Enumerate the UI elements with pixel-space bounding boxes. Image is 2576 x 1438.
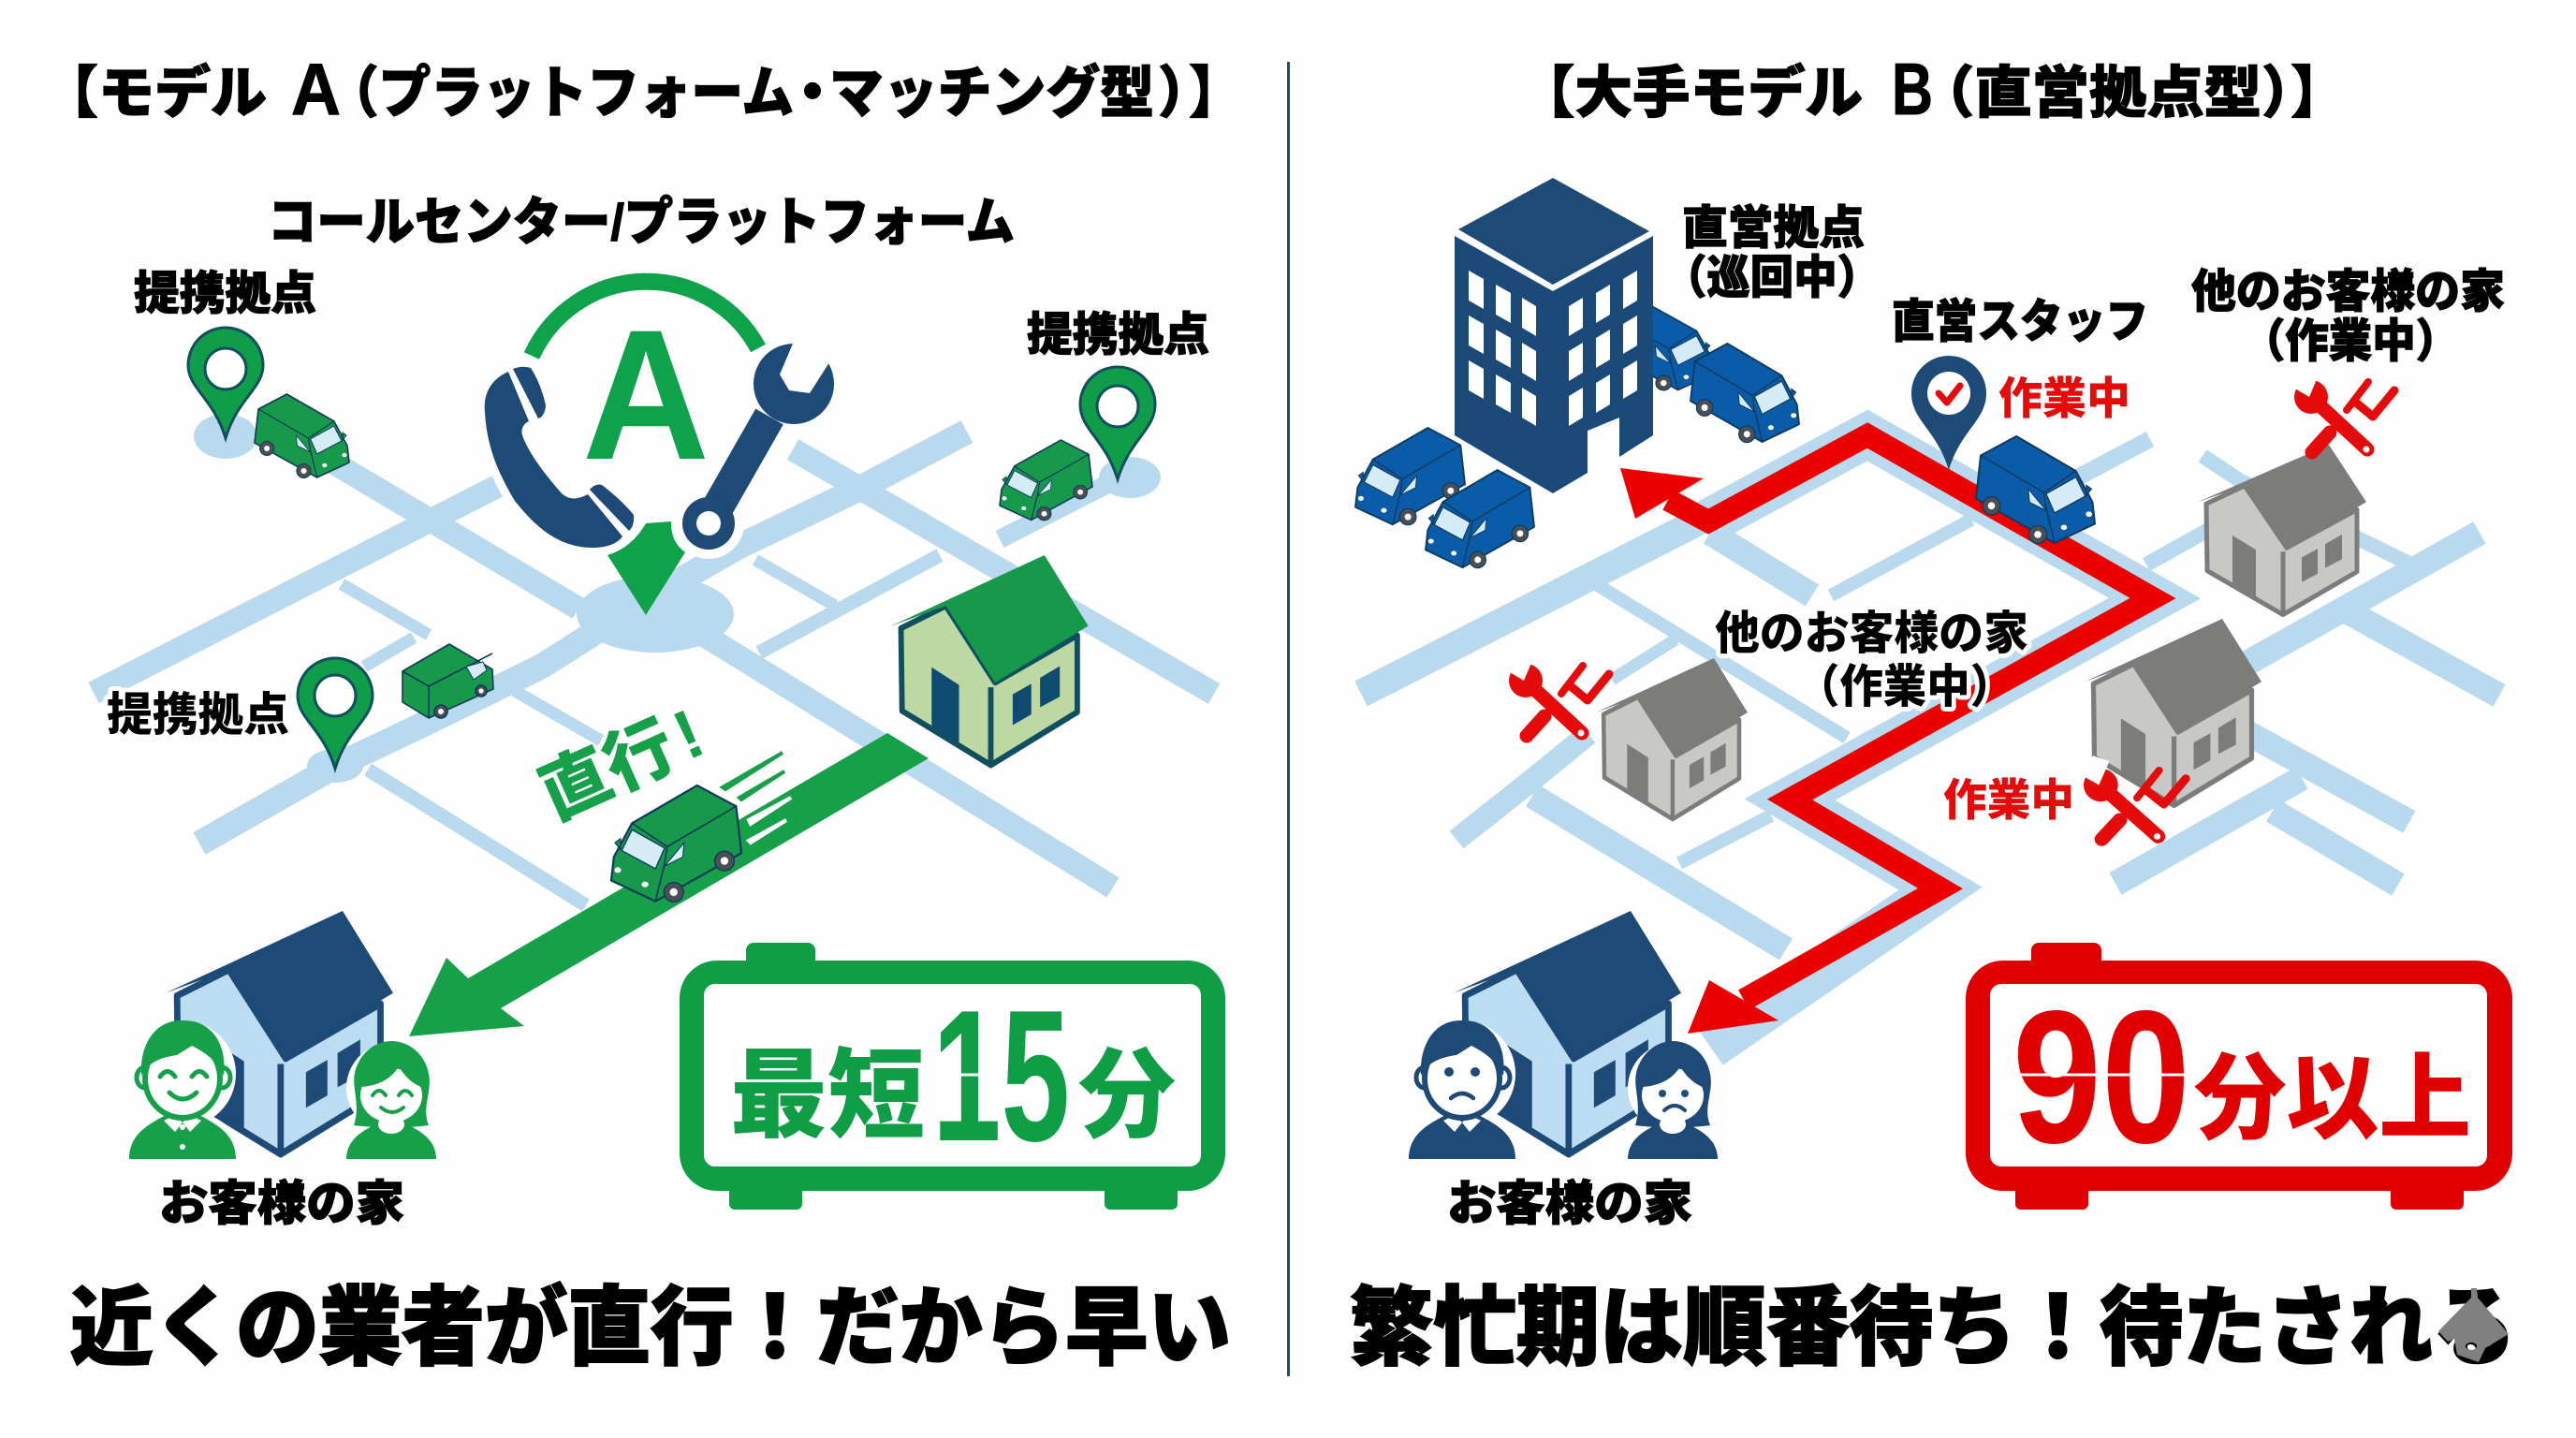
label: other customer 2: （作業中） — [1796, 662, 2013, 712]
icon: pointer — [607, 521, 685, 615]
label: direct base: （巡回中） — [1663, 253, 1881, 303]
label: direct base: 直営拠点 — [1682, 203, 1865, 254]
van: partner 2 — [1000, 440, 1092, 521]
label: call center: コールセンター/プラットフォーム — [268, 193, 1015, 251]
heading: model A: ・ — [784, 62, 841, 125]
timer: fastest 15 minutes: 15 — [932, 972, 1070, 1181]
icon letter A: A — [582, 291, 710, 498]
conclusion: model B: 繁忙期は順番待ち！待たされる — [1350, 1281, 2516, 1376]
van: staff — [1976, 436, 2095, 544]
icon: phone — [485, 367, 634, 548]
icon: wrench — [673, 328, 839, 559]
heading: model B: B — [1892, 48, 1933, 130]
label: customer home A: お客様の家 — [159, 1177, 404, 1230]
label: working 2 (red): 作業中 — [1943, 775, 2074, 825]
pin and label: partner 1 — [134, 269, 316, 438]
label: customer home B: お客様の家 — [1447, 1177, 1692, 1230]
timer: fastest 15 minutes: 最短 — [730, 1042, 925, 1151]
van: direct — [611, 785, 741, 902]
person: woman worried — [1628, 1041, 1718, 1159]
building: direct base — [1455, 178, 1653, 493]
timer: over 90 minutes: 分以上 — [2194, 1047, 2471, 1152]
timer: fastest 15 minutes: 分 — [1078, 1042, 1176, 1151]
icon: tools 2 — [2078, 756, 2186, 840]
house: customer B — [1454, 911, 1681, 1154]
house: customer A — [166, 911, 393, 1154]
label: direct base — [1663, 203, 1881, 303]
label: working (red): 作業中 — [1998, 374, 2130, 423]
heading: model A: （プラットフォーム — [327, 62, 794, 125]
heading: model B — [1517, 48, 2347, 130]
pin and label: partner 2 — [1027, 310, 1209, 479]
label: other customer 1: （作業中） — [2242, 316, 2459, 367]
label: other customer 1: 他のお客様の家 — [2191, 267, 2505, 317]
label: direct: 直行! — [529, 694, 715, 834]
conclusion: model A: 近くの業者が直行！だから早い — [70, 1281, 1231, 1376]
house: other customer 3 — [1596, 658, 1748, 819]
icon: tools 3 — [1503, 651, 1609, 736]
heading: model A: 【モデル — [42, 62, 267, 125]
panel: model A — [42, 48, 1243, 1376]
heading: model B: ） — [2261, 62, 2318, 125]
heading: model A: ） — [1158, 62, 1212, 125]
timer: fastest 15 minutes — [680, 943, 1225, 1210]
label: other customer 2 — [1715, 609, 2028, 712]
house: other customer 2 — [2085, 619, 2261, 805]
timer: over 90 minutes — [1966, 943, 2512, 1210]
speed lines — [723, 753, 791, 843]
label: other customer 2: 他のお客様の家 — [1715, 609, 2028, 659]
label: other customer 1 — [2191, 267, 2505, 367]
icon: tools 1 — [2289, 367, 2394, 453]
heading: model A: マッチング型 — [829, 62, 1154, 125]
arrow: direct route — [409, 733, 929, 1036]
timer: over 90 minutes: 90 — [2012, 971, 2190, 1182]
icon arc — [532, 282, 758, 356]
label: direct staff: 直営スタッフ — [1892, 297, 2148, 347]
person: woman smiling — [346, 1041, 436, 1159]
watermark — [2438, 1288, 2509, 1362]
icon: A logo — [485, 282, 839, 615]
route: red patrol path — [1620, 435, 2153, 1034]
van: partner 3 rear view — [402, 644, 493, 718]
person: man smiling — [124, 1020, 242, 1162]
pin and label: partner 3 — [107, 658, 373, 769]
heading: model B: 】 — [2291, 62, 2347, 125]
arrowhead: to base — [1620, 468, 1704, 519]
house: other customer 1 — [2198, 445, 2366, 615]
pin and label: partner 2: 提携拠点 — [1027, 310, 1209, 360]
panel: model B — [1350, 48, 2516, 1376]
van: base rear — [1610, 302, 1713, 390]
road map: model A — [94, 414, 1214, 905]
road map: model B — [1361, 435, 2499, 1047]
heading: model B: 【大手モデル — [1517, 62, 1863, 125]
arrowhead: to customer — [1688, 980, 1778, 1034]
heading: model A — [42, 48, 1243, 130]
house: partner home — [891, 555, 1089, 765]
van: parked left — [1355, 428, 1465, 525]
van: parked front — [1426, 470, 1534, 568]
heading: model A: 】 — [1189, 62, 1243, 125]
heading: model A: A — [291, 48, 341, 130]
person: man worried — [1403, 1020, 1521, 1162]
pin and label: partner 1: 提携拠点 — [134, 269, 316, 319]
van: base right — [1690, 344, 1799, 443]
divider — [1287, 62, 1290, 1376]
van: partner 1 — [255, 394, 349, 477]
pin and label: partner 3: 提携拠点 — [107, 690, 289, 741]
pin: staff — [1911, 356, 1986, 470]
heading: model B: （直営拠点型 — [1917, 62, 2261, 125]
